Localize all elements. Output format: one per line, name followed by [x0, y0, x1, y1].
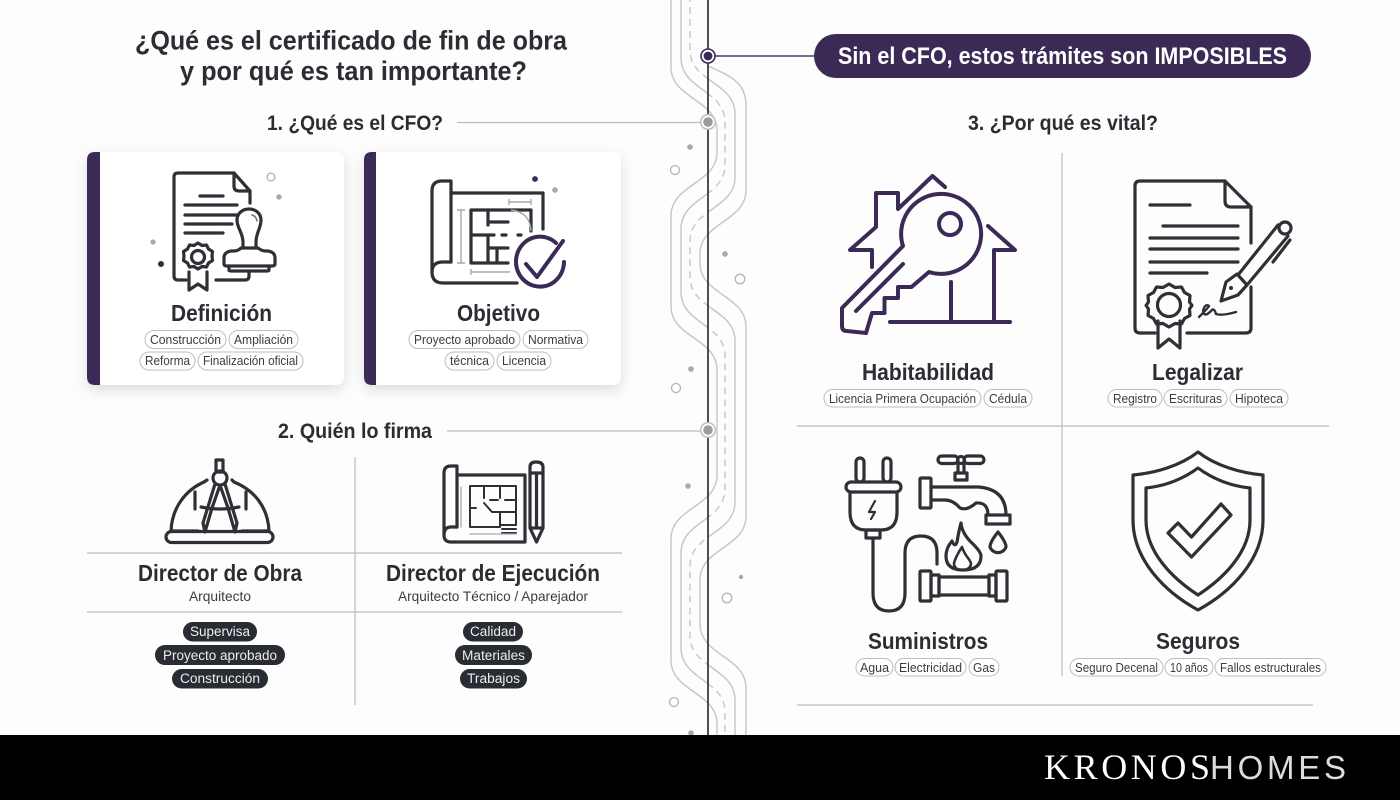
- tags: director de ejecución: Calidad: [470, 624, 516, 639]
- tags: objetivo: técnica: [450, 354, 489, 368]
- logo: Kronos Homes: HOMES: [1210, 749, 1346, 786]
- tags: definición: Ampliación: [234, 333, 293, 347]
- panel: por qué es vital: Seguros: [1156, 628, 1240, 654]
- heading: section 2: 2. Quién lo firma: [278, 420, 432, 443]
- panel: definición: Definición: [171, 300, 272, 326]
- connector: section 2: [447, 430, 701, 432]
- panel: quién lo firma: [87, 457, 622, 705]
- heading: section 1: 1. ¿Qué es el CFO?: [267, 112, 443, 135]
- tags: seguros: Seguro Decenal: [1075, 661, 1158, 675]
- tags: suministros: [856, 658, 999, 676]
- panel: definición: [87, 152, 344, 385]
- tags: suministros: Gas: [973, 661, 995, 675]
- icon: house and key: [842, 176, 1015, 333]
- tags: director de ejecución: Materiales: [462, 648, 525, 663]
- panel: objetivo: Objetivo: [457, 300, 540, 326]
- tags: suministros: Electricidad: [899, 661, 962, 675]
- tags: suministros: Agua: [860, 661, 889, 675]
- title: [135, 26, 568, 86]
- badge: imposibles: [814, 34, 1311, 78]
- panel: quién lo firma: Arquitecto Técnico / Aparejador: [398, 588, 588, 604]
- node: section 1: [701, 115, 715, 129]
- tags: objetivo: Normativa: [528, 333, 583, 347]
- panel: por qué es vital: Habitabilidad: [862, 359, 994, 385]
- tags: legalizar: Registro: [1113, 392, 1157, 406]
- icon: blueprint with check: [432, 181, 564, 287]
- central wavy route: [670, 0, 746, 740]
- tags: objetivo: [409, 330, 588, 370]
- logo: Kronos Homes: KRONOS: [1044, 747, 1210, 787]
- tags: objetivo: Proyecto aprobado: [414, 333, 515, 347]
- panel: objetivo: [364, 152, 621, 385]
- heading: section 3: 3. ¿Por qué es vital?: [968, 112, 1158, 135]
- title: y por qué es tan importante?: [180, 56, 527, 86]
- tags: habitabilidad: [824, 390, 1032, 407]
- tags: director de obra: Proyecto aprobado: [163, 648, 277, 663]
- badge: imposibles: Sin el CFO, estos trámites son IMPOSIBLES: [838, 43, 1287, 70]
- tags: director de ejecución: [455, 622, 532, 688]
- panel: quién lo firma: Director de Ejecución: [386, 560, 600, 586]
- icon: utilities: [846, 456, 1010, 611]
- tags: director de obra: [155, 622, 285, 688]
- tags: legalizar: Escrituras: [1169, 392, 1222, 406]
- tags: legalizar: [1108, 390, 1288, 407]
- tags: director de obra: Supervisa: [190, 624, 250, 639]
- tags: definición: [140, 330, 303, 370]
- title: ¿Qué es el certificado de fin de obra: [135, 26, 568, 56]
- icon: helmet and compass: [166, 460, 273, 542]
- icon: signed document: [1135, 181, 1291, 348]
- node: badge: [701, 49, 715, 63]
- tags: director de ejecución: Trabajos: [467, 671, 520, 686]
- panel: por qué es vital: Legalizar: [1152, 359, 1243, 385]
- connector: badge: [715, 55, 816, 57]
- panel: por qué es vital: [797, 153, 1329, 705]
- tags: director de obra: Construcción: [180, 671, 260, 686]
- tags: objetivo: Licencia: [502, 354, 546, 368]
- tags: habitabilidad: Licencia Primera Ocupación: [829, 392, 976, 406]
- icon: certificate and stamp: [174, 173, 275, 290]
- icon: blueprint and pencil: [444, 462, 543, 542]
- panel: quién lo firma: Arquitecto: [189, 588, 251, 604]
- icon: shield: [1133, 452, 1263, 610]
- tags: definición: Reforma: [145, 354, 190, 368]
- node: section 2: [701, 423, 715, 437]
- tags: definición: Finalización oficial: [203, 354, 298, 368]
- tags: habitabilidad: Cédula: [989, 392, 1027, 406]
- panel: quién lo firma: Director de Obra: [138, 560, 302, 586]
- panel: por qué es vital: Suministros: [868, 628, 988, 654]
- footer band: [0, 735, 1400, 800]
- logo: Kronos Homes: [1044, 747, 1346, 787]
- tags: seguros: 10 años: [1170, 661, 1208, 675]
- tags: legalizar: Hipoteca: [1235, 392, 1283, 406]
- connector: section 1: [457, 122, 701, 124]
- tags: seguros: [1070, 658, 1326, 676]
- tags: seguros: Fallos estructurales: [1220, 661, 1321, 675]
- tags: definición: Construcción: [150, 333, 221, 347]
